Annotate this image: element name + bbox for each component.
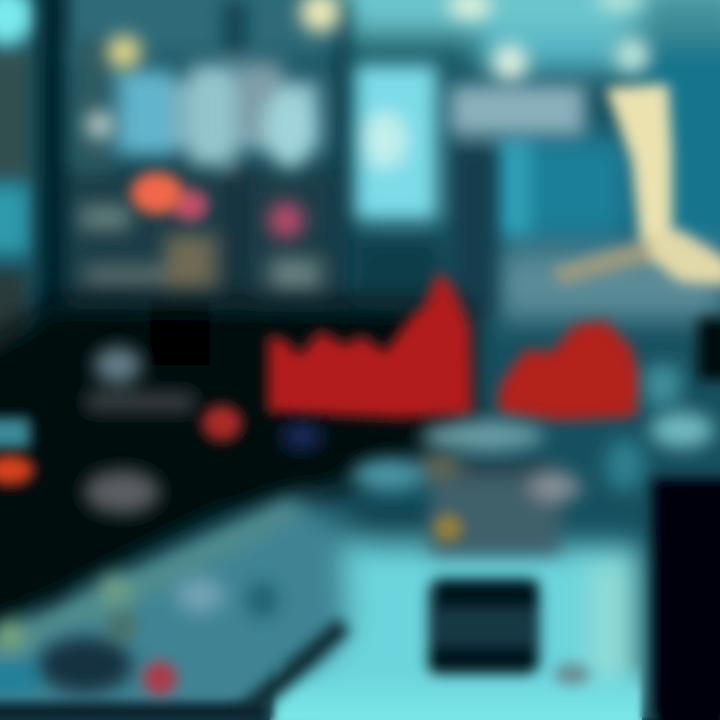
object: cup body on desk xyxy=(352,439,645,555)
left edge teal patch xyxy=(0,418,30,448)
bottom edge underlay: dark desk edge xyxy=(0,700,270,720)
bar chart: small red area xyxy=(498,320,640,420)
teal patch right xyxy=(645,365,680,405)
bottom edge underlay: right column xyxy=(642,700,720,720)
icon: red-orange blob xyxy=(131,172,183,214)
dark slash xyxy=(236,618,350,712)
icon: blue dot xyxy=(282,422,322,450)
panel: bright cyan window xyxy=(355,65,585,320)
bottom dark edge xyxy=(0,704,270,720)
desk edge highlight xyxy=(0,500,305,670)
icons: pale lights along top xyxy=(86,0,650,139)
bright teal edge beside dark column xyxy=(498,140,530,235)
object: grey oval on desk xyxy=(420,421,544,451)
panel: upper wall xyxy=(60,0,720,320)
dark vertical post xyxy=(40,0,66,620)
panel: left strip xyxy=(0,50,32,390)
icon: cyan corner glow xyxy=(0,0,34,46)
right column base xyxy=(660,680,720,720)
icon: bone-coloured tripod shape xyxy=(552,84,720,285)
icon: amber dot xyxy=(434,514,462,542)
bar chart: large red area xyxy=(268,272,472,418)
object: dark block xyxy=(428,578,540,674)
grey blocks xyxy=(84,347,195,514)
panel: dark lower area xyxy=(0,300,470,650)
desk shapes xyxy=(0,575,278,693)
object: small grey mark on floor xyxy=(554,663,590,685)
bottom edge underlay: floor xyxy=(270,700,642,720)
panel: right dark column xyxy=(652,478,720,720)
icon: red dot xyxy=(202,405,242,441)
icon: orange light left edge xyxy=(0,455,34,485)
icon: pink edge of orange blob xyxy=(172,189,208,221)
floor bottom glow xyxy=(275,660,640,720)
panel: floor and desk xyxy=(0,500,640,720)
icon: cyan glow right xyxy=(650,412,714,448)
panel: chart columns xyxy=(72,0,349,310)
icon: red dot bottom xyxy=(143,661,177,695)
panel: right dark block xyxy=(698,318,720,380)
icon: pink blob xyxy=(268,202,304,238)
